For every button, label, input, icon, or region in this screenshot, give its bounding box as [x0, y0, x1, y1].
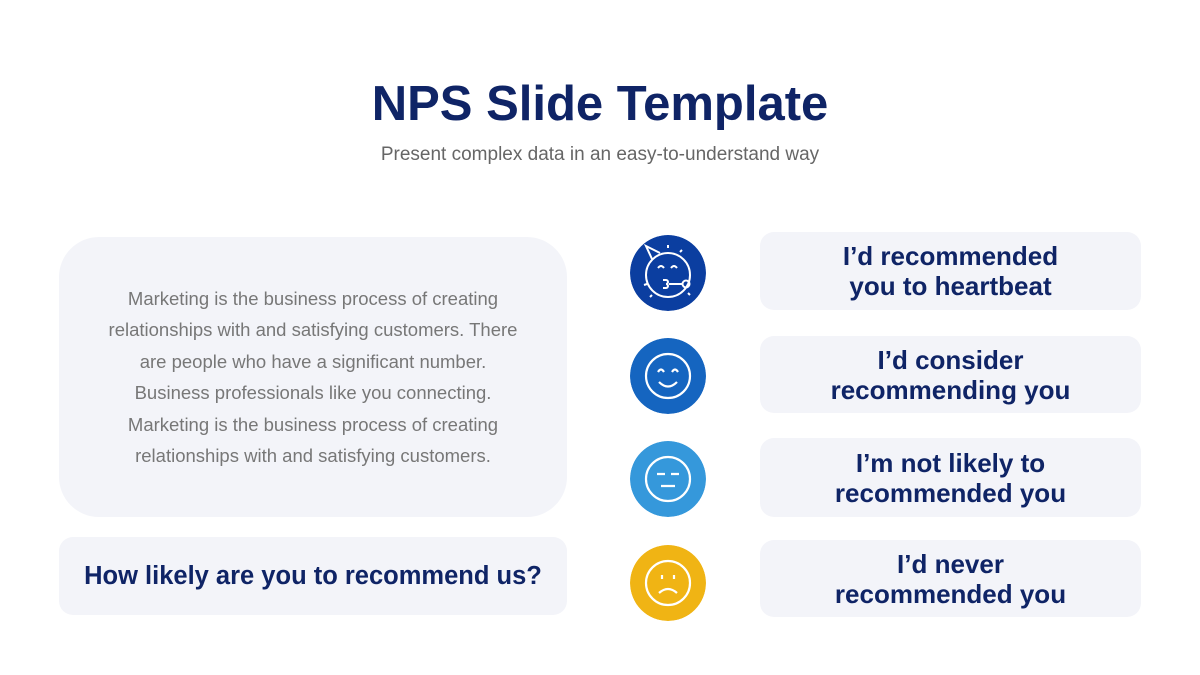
icon: sad [630, 545, 706, 621]
title: NPS Slide Template [372, 77, 828, 131]
answer 2 [760, 336, 1141, 413]
answer 4: recommended you [835, 578, 1066, 608]
answer 1: I’d recommended [843, 241, 1058, 271]
answer 1: you to heartbeat [849, 271, 1052, 301]
answer 4: I’d never [897, 548, 1004, 578]
answer 3: recommended you [835, 478, 1066, 508]
answer 4 [760, 540, 1141, 617]
panel: description: Business professionals like you connecting. [135, 382, 491, 403]
panel: description: Marketing is the business process of creating [128, 414, 498, 434]
panel: description: are people who have a significant number. [140, 350, 486, 372]
answer 3: I’m not likely to [856, 448, 1045, 478]
question box [59, 537, 567, 615]
panel: description: relationships with and satisfying customers. There [109, 319, 517, 340]
answer 1 [760, 232, 1141, 310]
icon: party face [630, 235, 706, 311]
panel: description [59, 237, 567, 517]
icon: neutral [630, 441, 706, 517]
icon: smile [630, 338, 706, 414]
question box: How likely are you to recommend us? [84, 562, 542, 590]
subtitle: Present complex data in an easy-to-understand way [381, 144, 819, 165]
answer 2: recommending you [831, 374, 1070, 404]
panel: description: relationships with and satisfying customers. [135, 445, 491, 466]
answer 2: I’d consider [878, 344, 1023, 374]
answer 3 [760, 438, 1141, 517]
panel: description: Marketing is the business process of creating [128, 288, 498, 308]
